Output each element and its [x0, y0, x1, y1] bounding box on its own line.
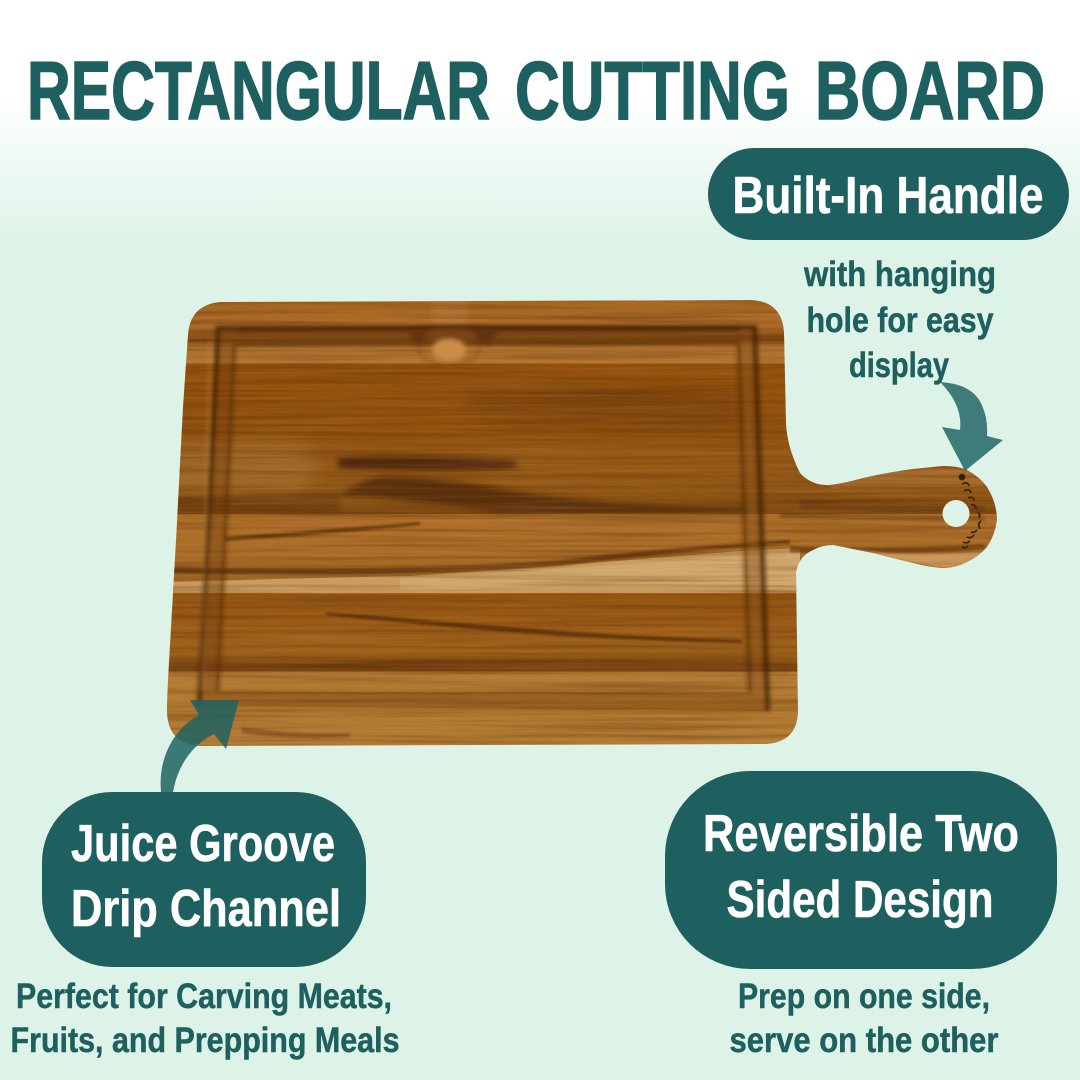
text: reversible note: [730, 977, 999, 1060]
text: juice groove note: Perfect for Carving Meats,: [16, 977, 392, 1016]
handle grain: [800, 500, 985, 512]
pill: juice groove: Drip Channel: [71, 880, 341, 938]
arrow: juice groove: [161, 700, 239, 792]
pill: juice groove: [42, 792, 366, 967]
background: [0, 0, 1080, 245]
juice groove channel: [199, 327, 768, 711]
text: hanging hole note: with hanging: [803, 255, 996, 294]
title: RECTANGULAR: [27, 44, 490, 137]
wood grain texture: [160, 295, 1010, 750]
pill: reversible design: Sided Design: [726, 871, 994, 929]
text: hanging hole note: display: [849, 346, 949, 385]
title: CUTTING: [515, 44, 790, 137]
pale sapwood wedge: [172, 548, 800, 593]
arrow: handle: [940, 382, 1003, 471]
text: reversible note: serve on the other: [730, 1021, 999, 1060]
text: hanging hole note: [803, 255, 996, 385]
text: juice groove note: Fruits, and Prepping Meals: [10, 1021, 400, 1060]
wooden cutting board: [160, 295, 1010, 750]
title: [27, 44, 1045, 137]
text: juice groove note: [10, 977, 400, 1060]
pill: built-in handle: [708, 148, 1069, 240]
text: hanging hole note: hole for easy: [806, 301, 994, 340]
pill: reversible design: Reversible Two: [703, 805, 1019, 863]
hanging hole: [942, 500, 970, 527]
pill: juice groove: Juice Groove: [71, 815, 335, 873]
engraved handle text: [960, 474, 981, 548]
text: reversible note: Prep on one side,: [738, 977, 990, 1016]
pill: reversible design: [665, 771, 1057, 969]
wood knot: [408, 326, 500, 365]
